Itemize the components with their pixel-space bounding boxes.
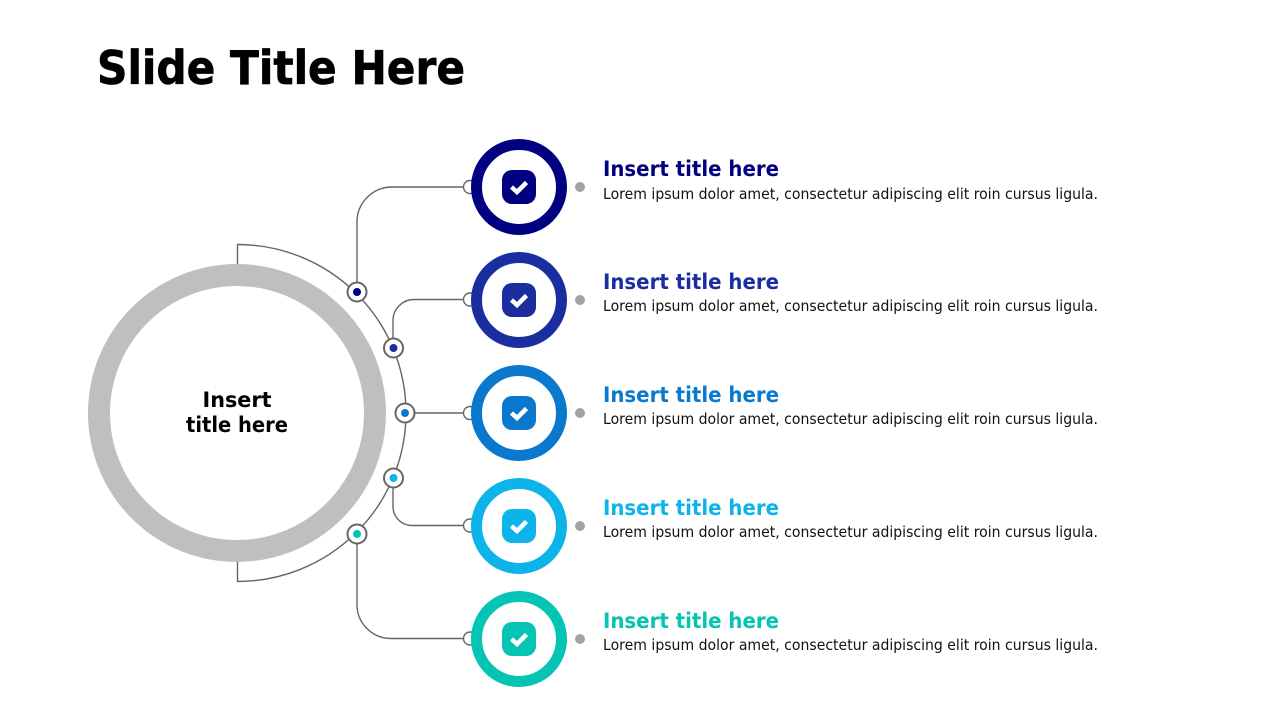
connector 4 (393, 485, 476, 532)
node 3 (396, 404, 414, 422)
item 5 bullet (575, 634, 585, 644)
connector 5 (357, 541, 476, 645)
item 1 ring and check icon (476, 144, 562, 230)
item 2 text (603, 270, 1098, 315)
central circle: title here (186, 413, 288, 437)
item 4 bullet (575, 521, 585, 531)
item 2 ring and check icon (476, 258, 562, 342)
item 5 text: Insert title here (603, 609, 779, 633)
item 1 text: Lorem ipsum dolor amet, consectetur adipiscing elit roin cursus ligula. (603, 185, 1098, 203)
item 5 ring and check icon (476, 596, 562, 682)
node 2 (384, 338, 403, 358)
title: Slide Title Here (97, 41, 465, 95)
item 2 bullet (575, 295, 585, 305)
item 5 text: Lorem ipsum dolor amet, consectetur adipiscing elit roin cursus ligula. (603, 636, 1098, 654)
item 1 text: Insert title here (603, 157, 779, 181)
item 5 text (603, 609, 1098, 654)
item 3 bullet (575, 408, 585, 418)
item 3 text (603, 383, 1098, 428)
outer arc around central circle (238, 244, 406, 582)
item 3 ring and check icon (476, 370, 562, 456)
item 2 text: Insert title here (603, 270, 779, 294)
node 5 (348, 524, 366, 544)
item 1 text (603, 157, 1098, 203)
item 4 text: Insert title here (603, 496, 779, 520)
item 4 ring and check icon (476, 484, 562, 568)
node 1 (348, 282, 366, 302)
connector 3 (405, 406, 476, 420)
item 4 text: Lorem ipsum dolor amet, consectetur adipiscing elit roin cursus ligula. (603, 523, 1098, 541)
item 3 text: Insert title here (603, 383, 779, 407)
central label: Insert (202, 388, 272, 412)
item 1 bullet (575, 182, 585, 192)
node 4 (384, 468, 403, 488)
connector 2 (393, 293, 476, 341)
central circle (99, 275, 375, 551)
item 3 text: Lorem ipsum dolor amet, consectetur adipiscing elit roin cursus ligula. (603, 410, 1098, 428)
item 4 text (603, 496, 1098, 541)
connector 1 (357, 180, 476, 285)
item 2 text: Lorem ipsum dolor amet, consectetur adipiscing elit roin cursus ligula. (603, 297, 1098, 315)
